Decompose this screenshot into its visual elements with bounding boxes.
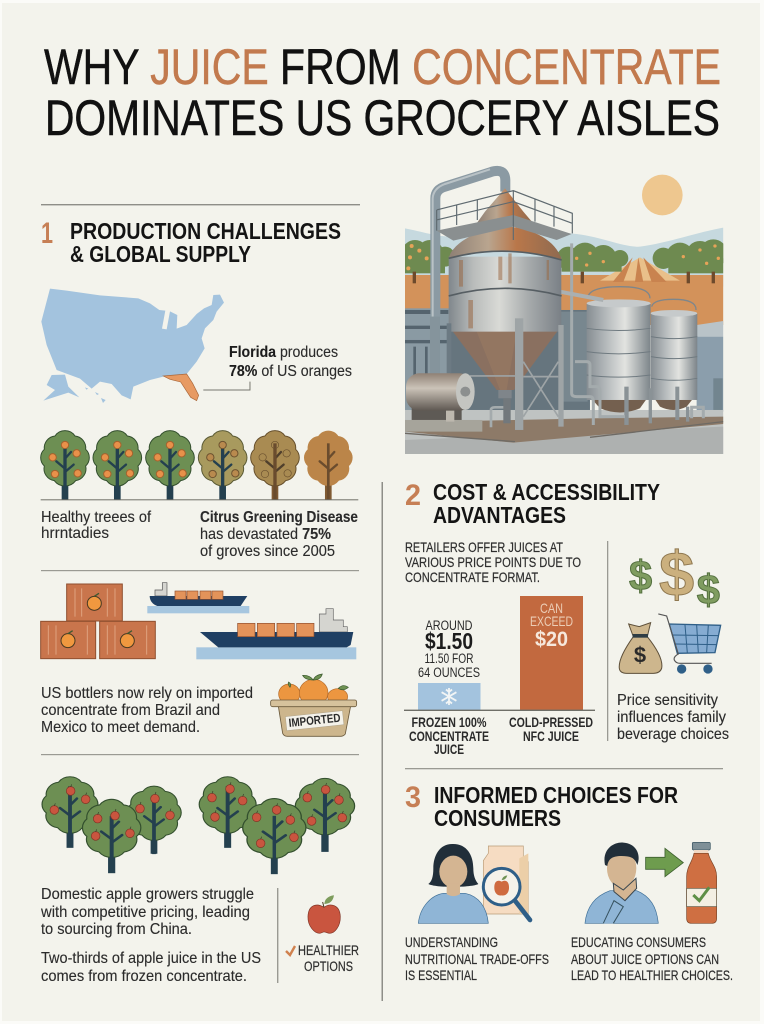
Florida callout [229,344,352,380]
icon: dollar signs: $ [629,552,652,599]
Florida callout: Florida produces [229,344,338,361]
imported text: US bottlers now rely on imported [41,685,253,702]
Florida callout: 78% of US oranges [229,363,352,380]
apple growers text: Two-thirds of apple juice in the US [41,950,261,967]
price sensitivity text: beverage choices [617,726,729,743]
large cargo ship [196,609,356,659]
icon: apple [308,895,340,933]
frozen price label: 64 OUNCES [418,665,480,680]
icon: dollar signs [629,540,720,613]
bar labels [409,714,593,757]
section 2 heading: 2 [405,479,421,512]
icon: dollar signs: $ [659,540,694,610]
consumer caption left: NUTRITIONAL TRADE-OFFS [405,951,549,967]
title [44,39,721,146]
section 1 heading: PRODUCTION CHALLENGES [70,218,341,244]
bar labels: NFC JUICE [523,728,579,744]
bar: cold-pressed [520,596,583,710]
cold-pressed price label: $20 [535,628,568,651]
imported text: Mexico to meet demand. [41,719,200,736]
apple growers text: with competitive pricing, leading [40,904,250,921]
icon: money bag: $ [634,643,646,668]
horizontal tank [405,373,482,432]
frozen price label [418,618,480,680]
healthy trees caption: Healthy treees of [41,509,152,526]
US map with Florida highlighted [41,289,250,403]
apple orchard [42,777,355,874]
big tower [430,169,572,430]
citrus greening caption: has devastated 75% [200,526,331,543]
consumer caption right: EDUCATING CONSUMERS [571,934,706,950]
citrus greening caption: Citrus Greening Disease [200,509,358,526]
price sensitivity text [617,692,729,743]
retailers text: RETAILERS OFFER JUICES AT [405,539,563,555]
icon: woman with carton and magnifier [418,844,530,923]
healthier options label: OPTIONS [304,958,353,974]
imported text [41,685,253,736]
healthy trees caption [41,509,152,542]
section 3 heading: INFORMED CHOICES FOR [434,782,678,808]
imported orange crate [271,674,357,736]
citrus greening caption [200,509,358,560]
icon: thinking man with arrow to bottle [585,842,717,923]
retailers text: VARIOUS PRICE POINTS DUE TO [405,554,581,570]
row of citrus trees declining [41,431,358,500]
retailers text: CONCENTRATE FORMAT. [405,569,540,585]
apple growers text [40,886,261,985]
imported text: concentrate from Brazil and [41,702,220,719]
consumer caption left: IS ESSENTIAL [405,967,477,983]
cold-pressed price label [530,600,573,651]
icon: dollar signs: $ [697,566,720,613]
right tanks [561,243,703,425]
bar labels: JUICE [434,741,464,757]
healthy trees caption: hrrntadies [41,525,109,542]
sun [642,175,683,215]
section 3 heading: 3 [405,781,421,814]
apple growers text: comes from frozen concentrate. [41,968,247,985]
consumer caption left [405,934,549,983]
section 2 heading: COST & ACCESSIBILITY [433,479,660,505]
healthier options label [286,942,359,974]
factory illustration [402,169,727,454]
section 1 heading: 1 [41,217,53,250]
icon: money bag [619,623,662,673]
crates of oranges [41,584,155,659]
section 2 heading: ADVANTAGES [433,502,566,528]
bar chart: juice prices [404,596,595,757]
consumer caption right [571,934,733,983]
price sensitivity text: influences family [617,709,726,726]
apple growers text: Domestic apple growers struggle [41,886,254,903]
frozen price label: AROUND [426,618,473,633]
frozen price label: 11.50 FOR [424,651,474,666]
section 3 heading: CONSUMERS [434,805,561,831]
healthier options label: HEALTHIER [298,942,359,958]
consumer caption left: UNDERSTANDING [405,934,498,950]
section 2 heading [405,479,660,528]
cold-pressed price label: EXCEED [530,613,573,629]
cold-pressed price label: CAN [540,600,563,616]
bar labels: CONCENTRATE [409,728,489,744]
small cargo ship [147,583,249,613]
citrus greening caption: of groves since 2005 [200,543,335,560]
bar: frozen concentrate [418,683,480,710]
section 3 heading [405,781,678,831]
section 1 heading [41,204,360,267]
section 1 heading: & GLOBAL SUPPLY [70,241,251,267]
price sensitivity text: Price sensitivity [617,692,718,709]
imported orange crate: IMPORTED [288,711,341,730]
bar labels: FROZEN 100% [412,714,487,730]
consumer caption right: ABOUT JUICE OPTIONS CAN [571,951,719,967]
icon: shopping cart [658,614,721,674]
frozen price label: $1.50 [425,628,473,654]
bar labels: COLD-PRESSED [509,714,593,730]
apple growers text: to sourcing from China. [41,921,192,938]
retailers text [405,539,581,585]
